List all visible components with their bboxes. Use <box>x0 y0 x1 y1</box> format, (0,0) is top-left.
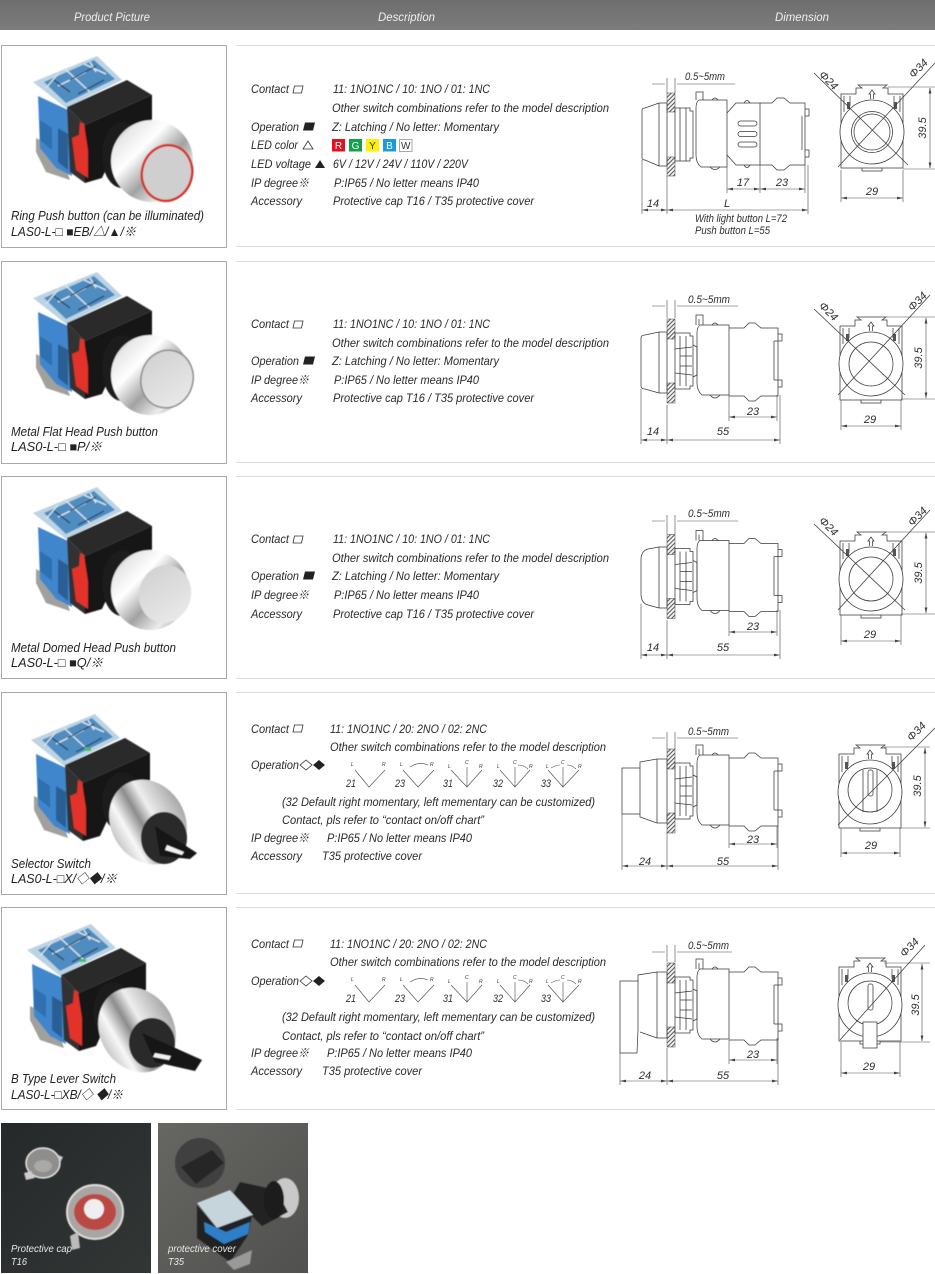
icon: led color hollow triangle <box>303 141 313 149</box>
operation position diagrams: R <box>382 762 386 768</box>
icon: contact hollow parallelogram <box>293 321 303 328</box>
front view drawing: 39.5 <box>913 346 925 369</box>
led color chips: R <box>335 141 342 152</box>
side view drawing <box>641 530 782 618</box>
front view drawing <box>814 57 935 202</box>
operation position diagrams: 23 <box>394 778 406 790</box>
front view drawing <box>814 505 935 645</box>
panel: B type lever switch description: 11: 1NO1NC / 20: 2NO / 02: 2NC <box>330 937 487 951</box>
front view drawing: 29 <box>865 186 878 198</box>
panel: B type lever switch description: Accessory <box>250 1064 303 1078</box>
operation position diagrams: L <box>546 764 549 770</box>
dimension labels: side view: 14 <box>647 426 659 438</box>
operation position diagrams: C <box>561 760 565 766</box>
heading: product picture: Product Picture <box>74 10 150 24</box>
operation position diagrams: R <box>479 979 483 985</box>
panel: B type lever switch description: Contact <box>251 937 290 951</box>
panel: metal domed head description: P:IP65 / No letter means IP40 <box>334 588 479 602</box>
panel: selector switch description: (32 Default right momentary, left mementary can be customized) <box>282 795 595 809</box>
operation position diagrams: 21 <box>345 993 356 1005</box>
caption: metal flat head: Metal Flat Head Push button <box>11 425 158 439</box>
dimension labels: side view: 23 <box>746 834 760 846</box>
dimension labels: side view: 0.5~5mm <box>685 71 725 83</box>
panel: selector switch description: Operation <box>251 758 299 772</box>
operation position diagrams: 23 <box>394 993 406 1005</box>
front view drawing: 29 <box>864 840 877 852</box>
panel: metal domed head description: Contact <box>251 532 290 546</box>
panel: ring push button description <box>250 82 609 208</box>
panel: ring push button description: LED voltage <box>251 157 311 171</box>
panel: B type lever switch description: P:IP65 / No letter means IP40 <box>327 1046 472 1060</box>
panel: B type lever switch description: Operation <box>251 974 299 988</box>
panel: selector switch picture <box>2 692 226 894</box>
icon: operation solid parallelogram <box>303 356 315 364</box>
caption: ring push button: Ring Push button (can be illuminated) <box>11 209 204 223</box>
dimension labels: side view: 23 <box>746 406 760 418</box>
panel: selector switch description: T35 protective cover <box>322 849 423 863</box>
panel: ring push button description: Operation <box>251 120 299 134</box>
small clear cap <box>24 1148 63 1180</box>
panel: metal flat head description: 11: 1NO1NC / 10: 1NO / 01: 1NC <box>333 317 490 331</box>
icon: contact hollow parallelogram <box>293 725 303 732</box>
front view drawing: 39.5 <box>917 116 929 139</box>
panel: metal flat head description: Accessory <box>250 391 303 405</box>
icon: contact hollow parallelogram <box>293 940 303 947</box>
dimension labels: side view <box>620 940 778 1085</box>
panel: ring push button description: LED color <box>251 138 299 152</box>
led color chips <box>332 139 412 152</box>
panel: selector switch description: 11: 1NO1NC / 20: 2NO / 02: 2NC <box>330 722 487 736</box>
dimension labels: side view: 0.5~5mm <box>688 726 729 738</box>
model code: metal domed head: LAS0-L-□ ■Q/※ <box>11 656 104 670</box>
dimension labels: side view: With light button L=72 <box>695 213 787 225</box>
operation position diagrams: L <box>448 979 451 985</box>
model code: ring push button: LAS0-L-□ ■EB/△/▲/※ <box>11 225 136 239</box>
dimension labels: side view: 55 <box>717 856 730 868</box>
panel: metal domed head description: IP degree※ <box>251 588 310 602</box>
panel: metal flat head description: Operation <box>251 354 299 368</box>
side view drawing <box>620 959 782 1053</box>
panel: selector switch description: Other switch combinations refer to the model description <box>330 740 606 754</box>
dimension labels: side view: 23 <box>746 621 760 633</box>
operation position diagrams: 32 <box>493 778 503 790</box>
operation position diagrams: C <box>465 975 469 981</box>
operation position diagrams: R <box>529 764 533 770</box>
panel: ring push button description: IP degree※ <box>251 176 310 190</box>
dimension labels: side view: Push button L=55 <box>695 225 771 237</box>
operation position diagrams: R <box>578 764 582 770</box>
dimension labels: side view <box>641 508 780 659</box>
dimension labels: side view <box>642 71 808 237</box>
front view drawing: Φ34 <box>907 57 931 81</box>
icon: contact hollow parallelogram <box>293 86 303 93</box>
operation position diagrams: 21 <box>345 778 356 790</box>
front view drawing: Φ34 <box>905 720 929 744</box>
icon: contact hollow parallelogram <box>293 536 303 543</box>
dimension labels: side view: L <box>724 198 730 210</box>
operation position diagrams: 33 <box>541 993 552 1005</box>
header bar <box>0 0 935 30</box>
panel: metal flat head description: Protective cap T16 / T35 protective cover <box>333 391 535 405</box>
panel: B type lever switch description <box>250 937 606 1078</box>
heading: description: Description <box>378 10 435 24</box>
panel: metal domed head dimension <box>641 505 935 659</box>
dimension labels: side view: 0.5~5mm <box>688 508 730 520</box>
icon: operation solid parallelogram <box>303 122 315 130</box>
operation position diagrams: L <box>497 979 500 985</box>
dimension labels: side view: 55 <box>717 1070 730 1082</box>
dimension labels: side view <box>622 726 778 870</box>
operation position diagrams: R <box>529 979 533 985</box>
operation position diagrams: C <box>561 975 565 981</box>
icon: operation diamonds <box>300 760 325 770</box>
icon: operation diamonds <box>300 976 325 986</box>
front view drawing: Φ24 <box>816 69 840 93</box>
caption: protective cover <box>167 1243 236 1268</box>
panel: B type lever switch picture <box>2 908 226 1110</box>
dimension labels: side view: 23 <box>775 177 789 189</box>
caption: protective cap: Protective cap <box>11 1243 72 1255</box>
photo: metal domed head button <box>33 487 198 630</box>
panel: metal domed head description: 11: 1NO1NC / 10: 1NO / 01: 1NC <box>333 532 490 546</box>
panel: ring push button description: 6V / 12V / 24V / 110V / 220V <box>333 157 469 171</box>
caption: B type lever switch: B Type Lever Switch <box>11 1072 116 1086</box>
panel: ring push button description: P:IP65 / No letter means IP40 <box>334 176 479 190</box>
heading: dimension: Dimension <box>775 10 829 24</box>
operation position diagrams: C <box>465 760 469 766</box>
operation position diagrams: L <box>546 979 549 985</box>
model code: B type lever switch: LAS0-L-□XB/◇ ◆/※ <box>11 1088 123 1102</box>
operation position diagrams: R <box>430 762 434 768</box>
panel: ring push button description: 11: 1NO1NC / 10: 1NO / 01: 1NC <box>333 82 490 96</box>
panel: metal flat head description <box>250 317 609 405</box>
front view drawing: 29 <box>863 629 876 641</box>
operation position diagrams: R <box>382 977 386 983</box>
panel: selector switch description: Accessory <box>250 849 303 863</box>
led color chips: G <box>352 141 360 152</box>
panel: metal domed head picture <box>2 476 226 678</box>
dimension labels: side view: 55 <box>717 642 730 654</box>
panel: selector switch description: IP degree※ <box>251 831 310 845</box>
front view drawing: Φ34 <box>898 936 922 960</box>
dimension labels: side view: 24 <box>638 1070 651 1082</box>
photo: selector switch <box>31 714 202 879</box>
caption: selector switch: Selector Switch <box>11 857 91 871</box>
photo: B type lever switch <box>27 924 202 1087</box>
switch with cover <box>197 1178 299 1270</box>
panel: B type lever switch description: IP degree※ <box>251 1046 310 1060</box>
photo panel: protective cover T35 <box>158 1123 308 1273</box>
led color chips: W <box>401 141 411 152</box>
panel: B type lever switch dimension <box>620 936 930 1085</box>
panel: metal flat head description: Z: Latching / No letter: Momentary <box>331 354 500 368</box>
operation position diagrams: 31 <box>443 993 453 1005</box>
operation position diagrams: R <box>479 764 483 770</box>
panel: selector switch description: Contact, pls refer to “contact on/off chart” <box>282 813 485 827</box>
panel: B type lever switch description: Contact, pls refer to “contact on/off chart” <box>282 1029 485 1043</box>
panel: metal flat head description: IP degree※ <box>251 373 310 387</box>
front view drawing: Φ34 <box>906 505 930 529</box>
operation position diagrams: L <box>497 764 500 770</box>
dimension labels: side view: 17 <box>737 177 750 189</box>
caption: protective cap <box>11 1243 72 1268</box>
panel: metal domed head description: Protective cap T16 / T35 protective cover <box>333 607 535 621</box>
dimension labels: side view: 14 <box>647 198 659 210</box>
panel: ring push button description: Z: Latching / No letter: Momentary <box>331 120 500 134</box>
icon: led voltage solid triangle <box>315 160 325 168</box>
dimension labels: side view: 24 <box>638 856 651 868</box>
dimension labels: side view: 0.5~5mm <box>688 294 730 306</box>
caption: protective cover: protective cover <box>167 1243 236 1255</box>
front view drawing: 39.5 <box>912 774 924 797</box>
caption: protective cap: T16 <box>11 1256 27 1268</box>
model code: selector switch: LAS0-L-□X/◇◆/※ <box>11 872 117 886</box>
panel: metal domed head description: Operation <box>251 569 299 583</box>
caption: protective cover: T35 <box>168 1256 184 1268</box>
operation position diagrams: L <box>400 977 403 983</box>
operation position diagrams: C <box>513 975 517 981</box>
panel: B type lever switch description: Other switch combinations refer to the model description <box>330 955 606 969</box>
panel: ring push button picture <box>2 46 226 248</box>
panel: ring push button dimension <box>642 57 935 237</box>
operation position diagrams: 33 <box>541 778 552 790</box>
operation position diagrams: R <box>430 977 434 983</box>
led color chips: B <box>386 141 393 152</box>
panel: metal flat head description: Contact <box>251 317 290 331</box>
panel: metal domed head description <box>250 532 609 621</box>
icon: operation solid parallelogram <box>303 572 315 580</box>
panel: metal domed head description: Z: Latching / No letter: Momentary <box>331 569 500 583</box>
front view drawing: 29 <box>863 414 876 426</box>
front view drawing: 39.5 <box>910 993 922 1016</box>
front view drawing: Φ24 <box>816 300 840 324</box>
operation position diagrams <box>345 760 582 790</box>
side view drawing <box>622 745 782 833</box>
operation position diagrams: L <box>351 977 354 983</box>
photo panel: protective cap T16 <box>1 1123 151 1273</box>
panel: selector switch description: Contact <box>251 722 290 736</box>
caption: metal domed head: Metal Domed Head Push button <box>11 641 176 655</box>
front view drawing: Φ24 <box>816 515 840 539</box>
dimension labels: side view: 23 <box>746 1049 760 1061</box>
dimension labels: side view <box>641 294 780 444</box>
panel: selector switch description: P:IP65 / No letter means IP40 <box>327 831 472 845</box>
operation position diagrams: C <box>513 760 517 766</box>
panel: metal domed head description: Accessory <box>250 607 303 621</box>
photo: metal flat head button <box>33 272 200 415</box>
operation position diagrams: 32 <box>493 993 503 1005</box>
front view drawing: 39.5 <box>913 561 925 584</box>
panel: selector switch description <box>250 722 606 863</box>
front view drawing <box>838 720 935 857</box>
panel: B type lever switch description: (32 Default right momentary, left mementary can be customized) <box>282 1010 595 1024</box>
operation position diagrams: 31 <box>443 778 453 790</box>
panel: metal flat head dimension <box>641 290 935 444</box>
operation position diagrams: R <box>578 979 582 985</box>
photo: ring push button <box>33 56 198 207</box>
panel: ring push button description: Accessory <box>250 194 303 208</box>
large cap over red button <box>67 1185 123 1250</box>
operation position diagrams: L <box>448 764 451 770</box>
led color chips: Y <box>369 141 376 152</box>
operation position diagrams <box>345 975 582 1005</box>
panel: metal flat head picture <box>2 262 226 464</box>
operation position diagrams: L <box>351 762 354 768</box>
model code: metal flat head: LAS0-L-□ ■P/※ <box>11 440 103 454</box>
inset circle with cover <box>175 1138 225 1188</box>
panel: ring push button description: Protective cap T16 / T35 protective cover <box>333 194 535 208</box>
panel: ring push button description: Contact <box>251 82 290 96</box>
panel: metal flat head description: Other switch combinations refer to the model description <box>332 336 609 350</box>
dimension labels: side view: 55 <box>717 426 730 438</box>
front view drawing <box>838 936 930 1077</box>
operation position diagrams: L <box>400 762 403 768</box>
panel: B type lever switch description: T35 protective cover <box>322 1064 423 1078</box>
panel: metal domed head description: Other switch combinations refer to the model description <box>332 551 609 565</box>
front view drawing <box>814 290 935 430</box>
side view drawing <box>641 315 782 403</box>
side view drawing <box>642 92 809 176</box>
dimension labels: side view: 0.5~5mm <box>688 940 729 952</box>
front view drawing: Φ34 <box>906 290 930 314</box>
dimension labels: side view: 14 <box>647 642 659 654</box>
front view drawing: 29 <box>862 1061 875 1073</box>
panel: metal flat head description: P:IP65 / No letter means IP40 <box>334 373 479 387</box>
panel: ring push button description: Other switch combinations refer to the model description <box>332 101 609 115</box>
panel: selector switch dimension <box>622 720 935 870</box>
